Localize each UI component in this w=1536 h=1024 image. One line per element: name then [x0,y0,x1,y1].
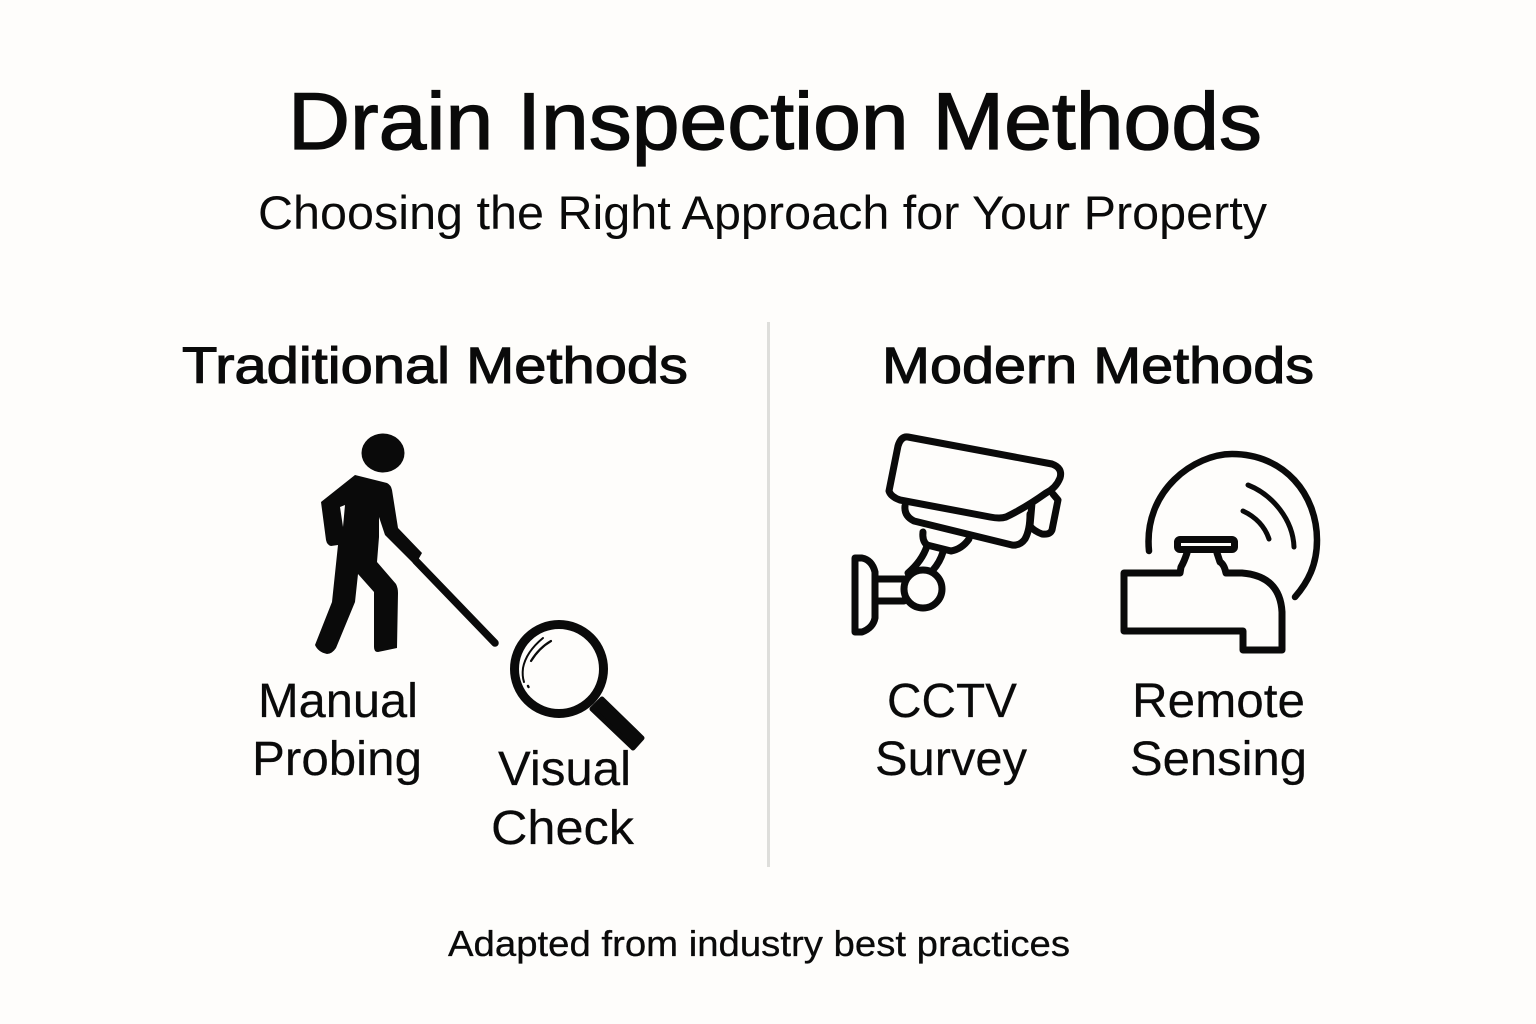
icon: CCTV camera [855,437,1061,632]
label: CCTV survey: Survey [875,733,1027,786]
label: visual check: Check [491,802,635,855]
divider between traditional and modern columns [767,322,770,867]
heading: traditional methods: Traditional Methods [182,337,688,394]
label: CCTV survey: CCTV [887,675,1017,728]
title: Drain Inspection Methods [288,77,1262,167]
panel: traditional methods [182,337,688,855]
label: manual probing: Manual [258,675,418,728]
probing rod [416,561,495,643]
label: visual check: Visual [498,743,631,796]
label: CCTV survey [875,675,1027,786]
icon: person probing with rod [315,434,495,654]
label: manual probing: Probing [252,733,422,786]
footer source note: Adapted from industry best practices [448,923,1070,964]
label: remote sensing [1130,675,1307,786]
label: visual check [491,743,635,855]
label: remote sensing: Sensing [1130,733,1307,786]
label: remote sensing: Remote [1132,675,1305,728]
icon: magnifying glass [514,624,642,748]
subtitle: Choosing the Right Approach for Your Property [258,186,1268,239]
icon: remote sensing tap with signal waves [1124,454,1317,650]
panel: modern methods [855,337,1317,786]
heading: modern methods: Modern Methods [882,337,1314,394]
label: manual probing [252,675,422,786]
